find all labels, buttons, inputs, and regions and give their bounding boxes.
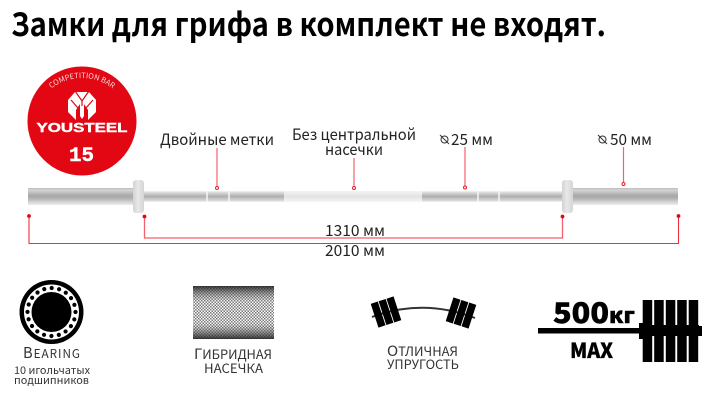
- knurling caption: [194, 343, 272, 377]
- bearing subcaption: 10 игольчатых: [14, 363, 91, 378]
- icon: 500 kg barbell: [538, 292, 702, 365]
- icon: hybrid knurling: [193, 286, 274, 339]
- label: no center knurl: насечки: [325, 138, 383, 160]
- flexibility caption: ОТЛИЧНАЯ: [387, 340, 458, 361]
- logo helmet icon: [68, 91, 96, 120]
- label: double marks: Двойные метки: [160, 128, 274, 150]
- knurling caption: ГИБРИДНАЯ: [194, 343, 272, 364]
- logo number: 15: [69, 145, 94, 168]
- bearing subcaption: подшипников: [14, 373, 89, 388]
- pointer: no center knurl: [352, 158, 356, 190]
- logo badge: [28, 66, 136, 176]
- knurling caption: НАСЕЧКА: [204, 358, 263, 377]
- label: no center knurl: Без центральной: [292, 123, 416, 145]
- right sleeve: [573, 188, 678, 205]
- label: 2010 mm: 2010 мм: [325, 239, 385, 261]
- flexibility caption: [387, 340, 459, 373]
- label: no center knurl: [292, 123, 416, 160]
- right plates: [446, 297, 476, 329]
- max label: MAX: [570, 335, 613, 365]
- dimension 2010 mm: [27, 214, 680, 244]
- bearing subcaption: [14, 363, 91, 388]
- bearing needles: [28, 288, 76, 336]
- shaft smooth: [144, 191, 562, 202]
- icon: bearing: [20, 280, 84, 344]
- left sleeve: [28, 188, 133, 205]
- logo arc text: COMPETITION BAR: [49, 72, 115, 88]
- bar: [538, 328, 702, 334]
- title: Замки для грифа в комплект не входят.: [11, 0, 606, 46]
- flexibility caption: УПРУГОСТЬ: [387, 354, 459, 373]
- right collar: [562, 180, 573, 213]
- pointer: 25 mm: [464, 147, 466, 189]
- left knurling: [144, 192, 284, 202]
- logo wordmark: YOUSTEEL: [36, 121, 128, 135]
- pointer: 50 mm: [622, 147, 625, 186]
- label: diameter 50 mm: 50 мм: [610, 128, 652, 150]
- right knurling: [422, 192, 562, 202]
- 500 kg label: 500кг: [553, 292, 635, 332]
- barbell diagram: [28, 180, 678, 213]
- bearing caption: BEARING: [23, 342, 81, 363]
- label: 1310 mm: 1310 мм: [325, 219, 385, 241]
- pointer: double marks: [216, 148, 218, 190]
- left collar: [133, 180, 144, 213]
- dimension 1310 mm: [143, 215, 564, 238]
- left plates: [371, 296, 401, 328]
- bearing caption: [14, 342, 91, 388]
- plates: [639, 300, 702, 362]
- label: diameter 25 mm: 25 мм: [451, 128, 493, 150]
- icon: flexing barbell: [371, 296, 476, 329]
